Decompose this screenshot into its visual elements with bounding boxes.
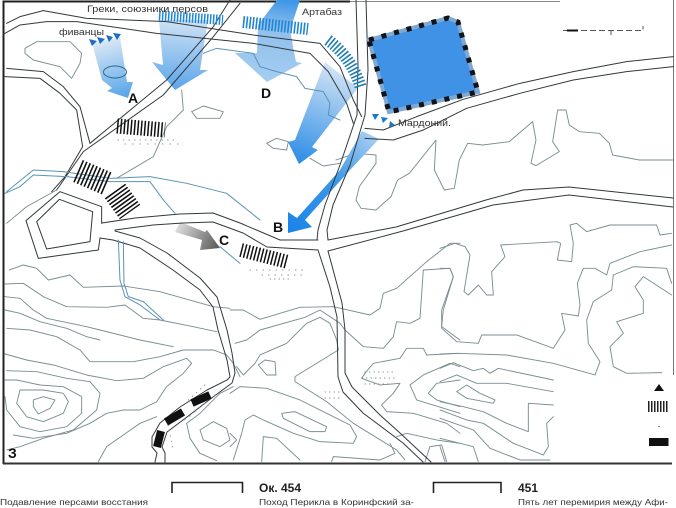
Theban triangles [89, 33, 121, 46]
Persian camp square [369, 18, 478, 112]
labels: C [219, 232, 229, 248]
Persian troops blocks [159, 16, 361, 88]
scale bar [563, 26, 643, 35]
labels: Артабаз [302, 7, 342, 18]
Greek troops blocks [78, 126, 288, 262]
stippled terrain [118, 140, 397, 450]
Mardonius triangles [372, 114, 395, 127]
labels: A [128, 90, 138, 106]
timeline: 451 [518, 481, 538, 495]
timeline: Поход Перикла в Коринфский за- [259, 497, 414, 507]
black road segments [157, 395, 210, 447]
timeline: Подавление персами восстания [0, 497, 148, 507]
labels: З [8, 445, 17, 461]
labels: B [273, 219, 283, 235]
legend [648, 384, 669, 446]
arrow: Persian attack towards centre [288, 62, 358, 164]
timeline: Пять лет перемирия между Афи- [518, 497, 668, 507]
unlabeled road lines in page units [317, 0, 358, 240]
arrow: Artabazus attack [235, 0, 302, 82]
labels [8, 4, 451, 461]
labels: Греки, союзники персов [87, 4, 208, 15]
labels: D [261, 85, 271, 101]
timeline [0, 481, 668, 507]
labels: Мардоний. [398, 118, 451, 129]
timeline: Ок. 454 [259, 481, 301, 495]
arrow: Mardonius attack [288, 131, 379, 233]
arrow: Theban attack [92, 37, 133, 98]
labels: фиванцы [59, 27, 104, 38]
arrow: Greek centre movement [175, 222, 220, 250]
arrow: Greek allies of Persians attack [152, 20, 208, 90]
